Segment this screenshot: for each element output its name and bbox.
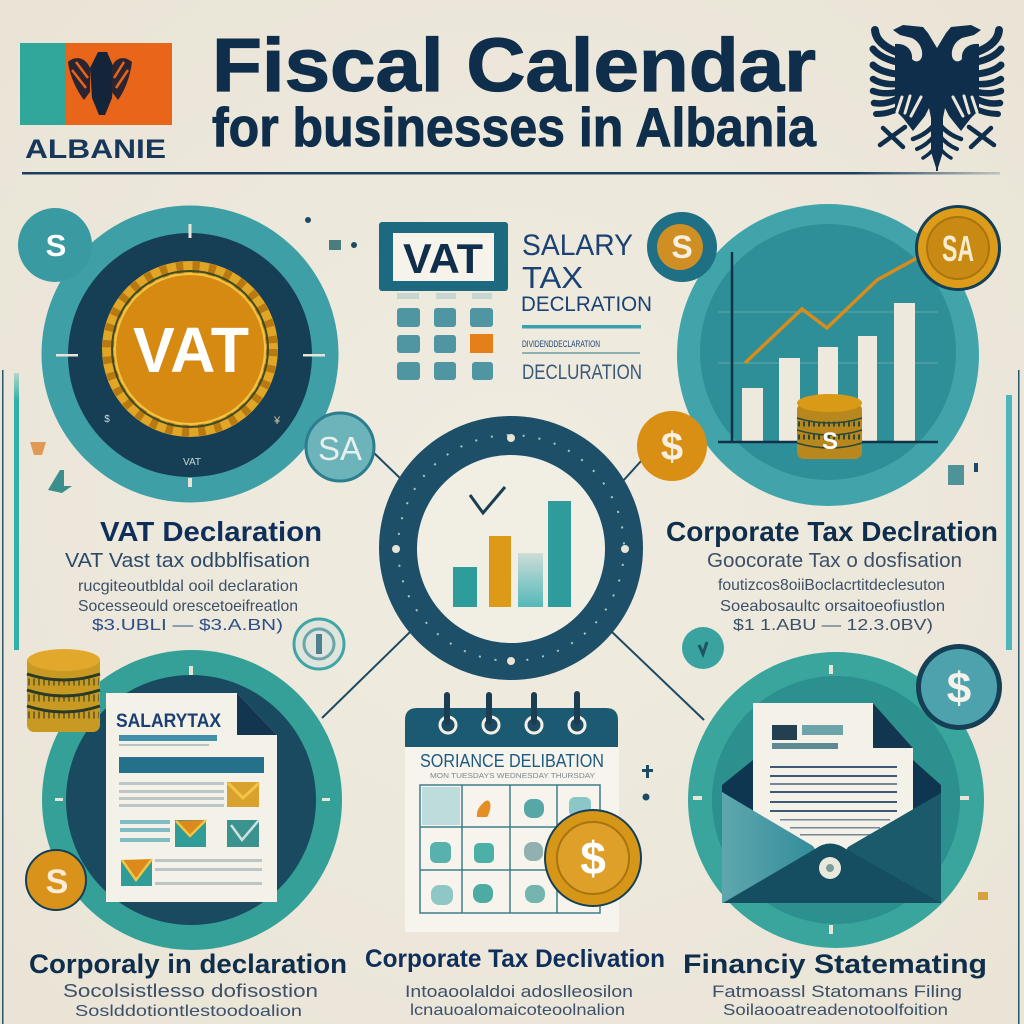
- title: Fiscal Calendar: [212, 23, 816, 107]
- text block: VAT declaration: [65, 516, 322, 634]
- calendar: [405, 694, 641, 932]
- icon: gold SA coin: SA: [942, 228, 974, 269]
- text block: salary tax declaration: DECLURATION: [522, 361, 642, 384]
- title: [212, 23, 816, 158]
- panel: VAT medallion: VAT: [183, 457, 201, 468]
- icon: teal small check coin: [682, 627, 724, 669]
- icon: pale ring coin: [294, 619, 344, 669]
- text block: VAT declaration: VAT Declaration: [100, 516, 322, 547]
- side rail lines: [2, 370, 1020, 1024]
- text block: financial statement: Soilaooatreadenotoolfoition: [723, 1002, 948, 1019]
- icon: coin stack: S: [822, 428, 838, 455]
- decorative specks: [30, 217, 988, 900]
- icon: gold SA coin: [915, 205, 1001, 291]
- calendar: SORIANCE DELIBATION: [420, 751, 604, 771]
- calendar: MON TUESDAYS WEDNESDAY THURSDAY: [430, 773, 595, 780]
- icon: check boxes: [121, 782, 259, 886]
- text block: corporate tax declaration: foutizcos8oiiBoclacrtitdeclesuton: [718, 577, 945, 594]
- icon: pale teal SA coin: SA: [318, 430, 362, 467]
- calculator icon: VAT: [403, 235, 483, 282]
- text block: VAT declaration: $3.UBLI — $3.A.BN): [92, 617, 283, 634]
- icon: VAT coin: VAT: [133, 314, 249, 386]
- panel: financial statement envelope: [688, 652, 984, 948]
- text block: bottom-left declaration: [29, 949, 347, 1020]
- icon: gold dollar coin: $: [661, 425, 683, 469]
- text block: corporate tax declaration: Soeabosaultc orsaitoeofiustlon: [720, 598, 945, 615]
- text block: bottom-centre declaration: Corporate Tax Declivation: [365, 945, 665, 973]
- text block: bottom-left declaration: Corporaly in declaration: [29, 949, 347, 979]
- text block: bottom-left declaration: Socolsistlesso dofisostion: [63, 981, 318, 1001]
- calculator icon: [379, 222, 508, 380]
- text block: bottom-centre declaration: Intoaoolaldoi adoslleosilon: [405, 982, 633, 1001]
- icon: flag eagle: [68, 52, 132, 115]
- connector lines: [322, 452, 704, 720]
- icon: gold S coin bottom-left: S: [46, 863, 68, 901]
- calendar rings: [440, 694, 585, 733]
- header divider: [22, 172, 1000, 174]
- text block: salary tax declaration: DECLRATION: [521, 293, 652, 316]
- icon: dollar coin on calendar: $: [580, 832, 606, 884]
- icon: teal dollar coin bottom-right: [916, 644, 1002, 730]
- text block: salary tax declaration: TAX: [522, 260, 583, 295]
- icon: gold dollar coin: [637, 411, 707, 481]
- icon: pale teal SA coin: [306, 413, 374, 481]
- icon: teal dollar coin bottom-right: $: [947, 664, 971, 713]
- text block: salary tax declaration: [521, 229, 652, 384]
- text block: salary tax declaration: SALARY: [522, 229, 633, 262]
- text block: corporate tax declaration: $1 1.ABU — 12.3.0BV): [733, 617, 933, 634]
- text block: financial statement: [683, 949, 987, 1019]
- text block: VAT declaration: VAT Vast tax odbblfisation: [65, 550, 310, 572]
- document: salary tax: [106, 693, 277, 902]
- panel: salary tax medallion: [42, 650, 342, 950]
- icon: check mark: [470, 487, 505, 513]
- icon: coin stack: [797, 394, 862, 459]
- icon: envelope back: [722, 760, 941, 830]
- flag caption: ALBANIE: [25, 134, 166, 164]
- text block: financial statement: Fatmoassl Statomans Filing: [712, 982, 962, 1001]
- icon: envelope front: [722, 792, 941, 903]
- icon: coin stack left: [27, 649, 100, 732]
- icon: teal dollar coin top-centre: [647, 212, 717, 282]
- text block: corporate tax declaration: [666, 516, 998, 634]
- panel: VAT medallion: $: [104, 414, 110, 425]
- calendar grid: [420, 785, 600, 913]
- text block: financial statement: Financiy Statemating: [683, 949, 987, 979]
- panel: tax chart: [677, 204, 979, 506]
- flag badge: Albanie: [20, 43, 172, 164]
- text block: bottom-centre declaration: [365, 945, 665, 1019]
- document: statement: [753, 703, 913, 850]
- document: salary tax: SALARYTAX: [116, 711, 221, 732]
- title: for businesses in Albania: [212, 96, 816, 158]
- icon: teal dollar coin top-centre: S: [671, 229, 693, 265]
- text block: salary tax declaration: DIVIDENDDECLARATION: [522, 339, 600, 349]
- icon: teal dollar coin top-left: S: [46, 228, 66, 263]
- icon: Albanian double-headed eagle: [873, 25, 1001, 171]
- icon: VAT coin: [102, 261, 278, 437]
- text block: VAT declaration: Socesseould orescetoeifreatlon: [78, 598, 298, 615]
- text block: VAT declaration: rucgiteoutbldal ooil declaration: [78, 578, 298, 595]
- icon: teal dollar coin top-left: [18, 208, 92, 282]
- text block: bottom-centre declaration: lcnauoalomaicoteoolnalion: [410, 1002, 625, 1019]
- panel: centre chart: [379, 416, 643, 680]
- panel: VAT medallion: [42, 206, 338, 502]
- bar chart: [718, 252, 938, 442]
- icon: gold S coin bottom-left: [26, 850, 86, 910]
- text block: bottom-left declaration: Soslddotiontlestoodoalion: [75, 1003, 302, 1020]
- icon: dollar coin on calendar: [545, 810, 641, 906]
- bar chart: centre: [453, 501, 571, 607]
- panel: VAT medallion: ¥: [273, 415, 281, 427]
- text block: corporate tax declaration: Corporate Tax Declration: [666, 516, 998, 547]
- text block: corporate tax declaration: Goocorate Tax o dosfisation: [707, 550, 962, 572]
